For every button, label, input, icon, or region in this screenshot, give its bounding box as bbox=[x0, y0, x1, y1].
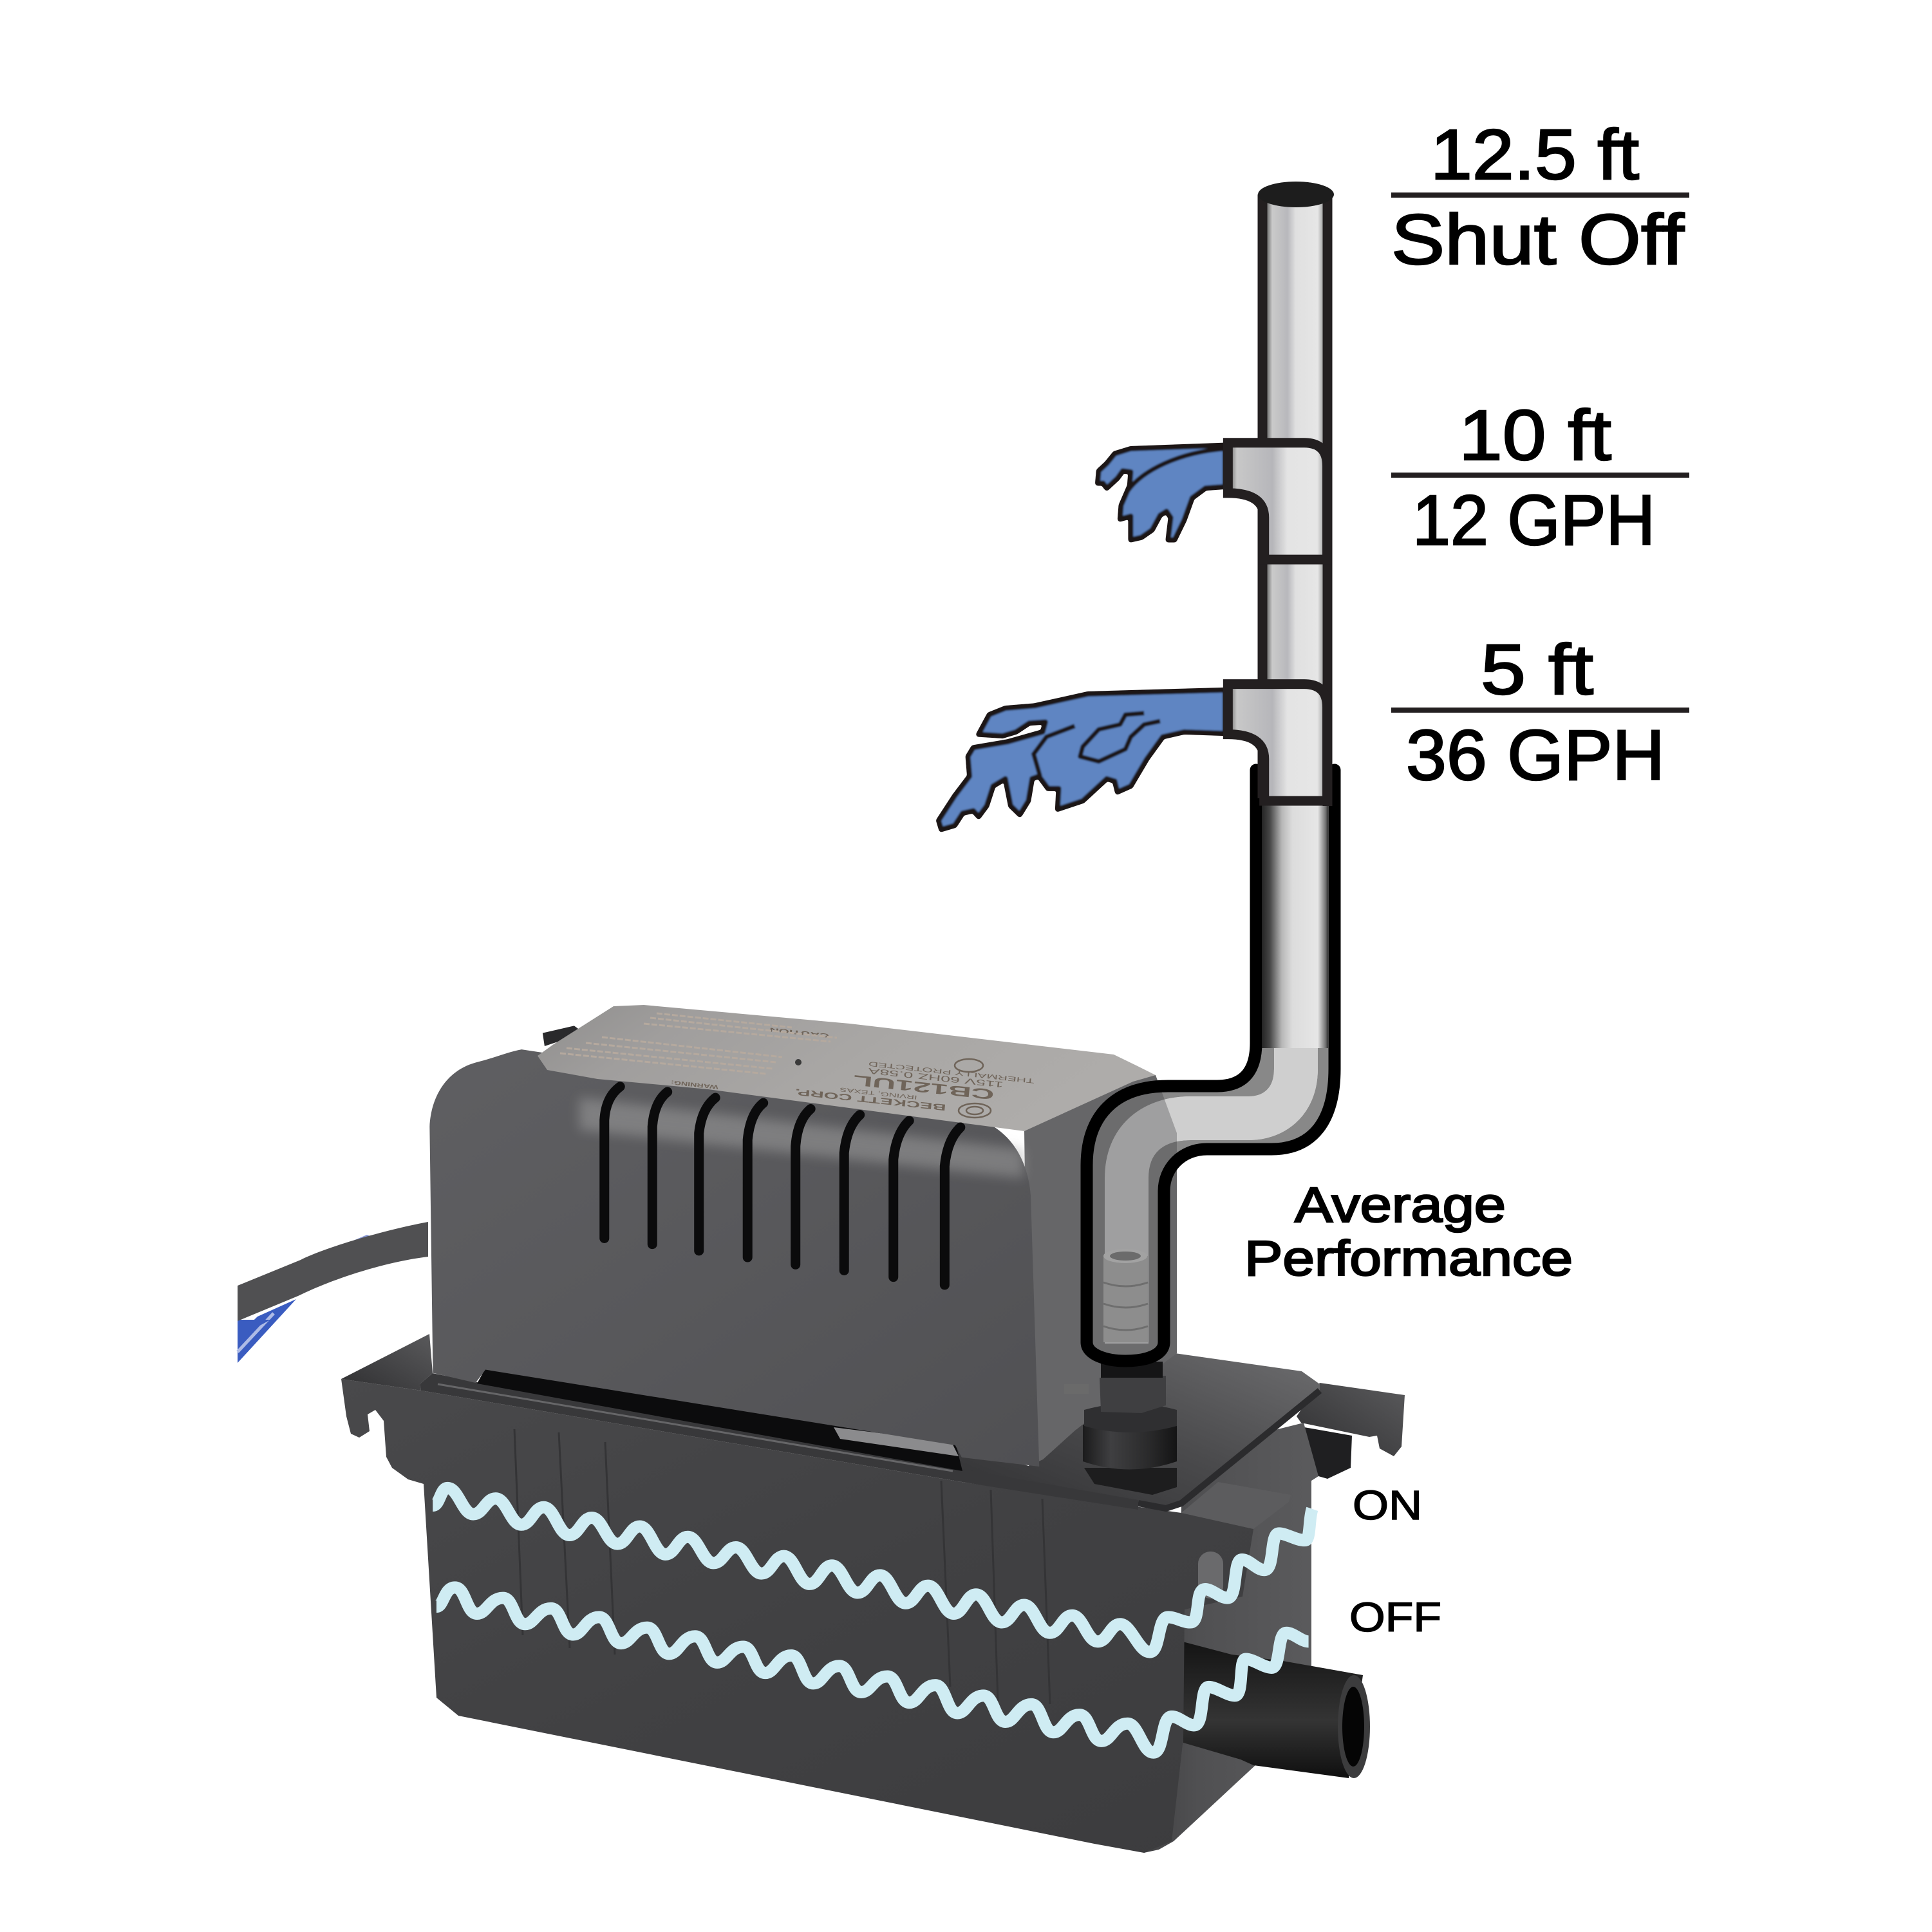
lower tee at 5 ft bbox=[1228, 684, 1327, 801]
power cable with blue wires bbox=[238, 1222, 428, 1363]
tube translucent core bbox=[1127, 1048, 1296, 1344]
water level wave: OFF bbox=[436, 1588, 1309, 1752]
discharge tube bbox=[1087, 770, 1335, 1361]
right flange bbox=[1181, 1482, 1291, 1529]
pipe top opening bbox=[1258, 182, 1334, 207]
right mounting tab post bbox=[1304, 1427, 1352, 1479]
label: 12.5 ft shut off: Shut Off bbox=[1391, 200, 1684, 279]
lower pipe body bbox=[1262, 798, 1328, 1048]
model label text: CB121UL bbox=[852, 1072, 995, 1102]
logo and certification marks bbox=[955, 1059, 991, 1118]
label: 12.5 ft shut off: 12.5 ft bbox=[1430, 115, 1639, 194]
tube outline bbox=[1087, 770, 1335, 1361]
tray top plate bbox=[953, 1353, 1320, 1510]
water level wave: ON bbox=[433, 1488, 1312, 1652]
label: 5 ft 36 GPH bbox=[1391, 630, 1689, 795]
water stream at 5 ft bbox=[939, 690, 1225, 829]
side slot bbox=[1198, 1552, 1223, 1599]
label: 10 ft 12 GPH: 10 ft bbox=[1459, 396, 1611, 475]
label: 10 ft 12 GPH bbox=[1391, 396, 1689, 560]
tee fittings bbox=[1228, 443, 1327, 801]
label: 10 ft 12 GPH: 12 GPH bbox=[1412, 481, 1655, 560]
tank ribs bbox=[514, 1429, 1050, 1704]
label: average performance: Average bbox=[1295, 1177, 1506, 1233]
tray plate rim bbox=[1138, 1391, 1320, 1508]
metal float plate bbox=[834, 1427, 959, 1456]
vertical pipe bbox=[1258, 182, 1334, 1048]
discharge fitting bbox=[1064, 1362, 1177, 1495]
cover side bbox=[1024, 1071, 1177, 1466]
tank front face bbox=[341, 1379, 1253, 1853]
left mounting tab top bbox=[341, 1334, 433, 1391]
tray ridge bbox=[420, 1373, 1138, 1510]
ridge highlight bbox=[438, 1384, 953, 1471]
label: average performance: Performance bbox=[1244, 1231, 1573, 1286]
fine print lines bbox=[560, 1013, 837, 1074]
right mounting tab bbox=[1297, 1383, 1405, 1456]
model label text bbox=[671, 1026, 1035, 1113]
dark cavity under cover bbox=[477, 1365, 962, 1471]
pipe walls bbox=[1262, 194, 1327, 806]
label: 5 ft 36 GPH: 36 GPH bbox=[1406, 716, 1665, 795]
model label text: 115V 60HZ 0.58A bbox=[867, 1066, 1004, 1089]
rear knob bbox=[543, 1026, 584, 1046]
outlet pipe bbox=[1183, 1642, 1370, 1778]
reflection band bbox=[579, 1098, 1024, 1178]
model label text: WARNING: bbox=[671, 1079, 718, 1090]
label: average performance bbox=[1244, 1177, 1573, 1286]
model label text: CAUTION bbox=[769, 1026, 829, 1038]
tube rim shading bbox=[1161, 806, 1329, 1152]
model label text: THERMALLY PROTECTED bbox=[868, 1060, 1035, 1085]
cover top label face bbox=[538, 1005, 1156, 1131]
label: OFF level: OFF bbox=[1349, 1594, 1441, 1640]
label rivet bbox=[795, 1059, 802, 1065]
label: ON level: ON bbox=[1353, 1482, 1422, 1528]
pump photograph illustration bbox=[238, 1005, 1405, 1853]
barbed connector seen through tube bbox=[1103, 1249, 1148, 1342]
cover front bbox=[429, 1049, 1039, 1467]
motor cover bbox=[429, 1005, 1177, 1467]
model label text: BECKETT CORP. bbox=[794, 1087, 946, 1113]
vent slots bbox=[605, 1087, 961, 1285]
model label text: IRVING, TEXAS bbox=[839, 1086, 917, 1100]
upper pipe body bbox=[1262, 194, 1327, 806]
label: 12.5 ft shut off bbox=[1391, 115, 1689, 279]
label: 5 ft 36 GPH: 5 ft bbox=[1481, 630, 1593, 709]
tank side wall bbox=[1133, 1423, 1318, 1853]
upper tee at 10 ft bbox=[1228, 443, 1327, 559]
water stream at 10 ft bbox=[1098, 445, 1225, 539]
